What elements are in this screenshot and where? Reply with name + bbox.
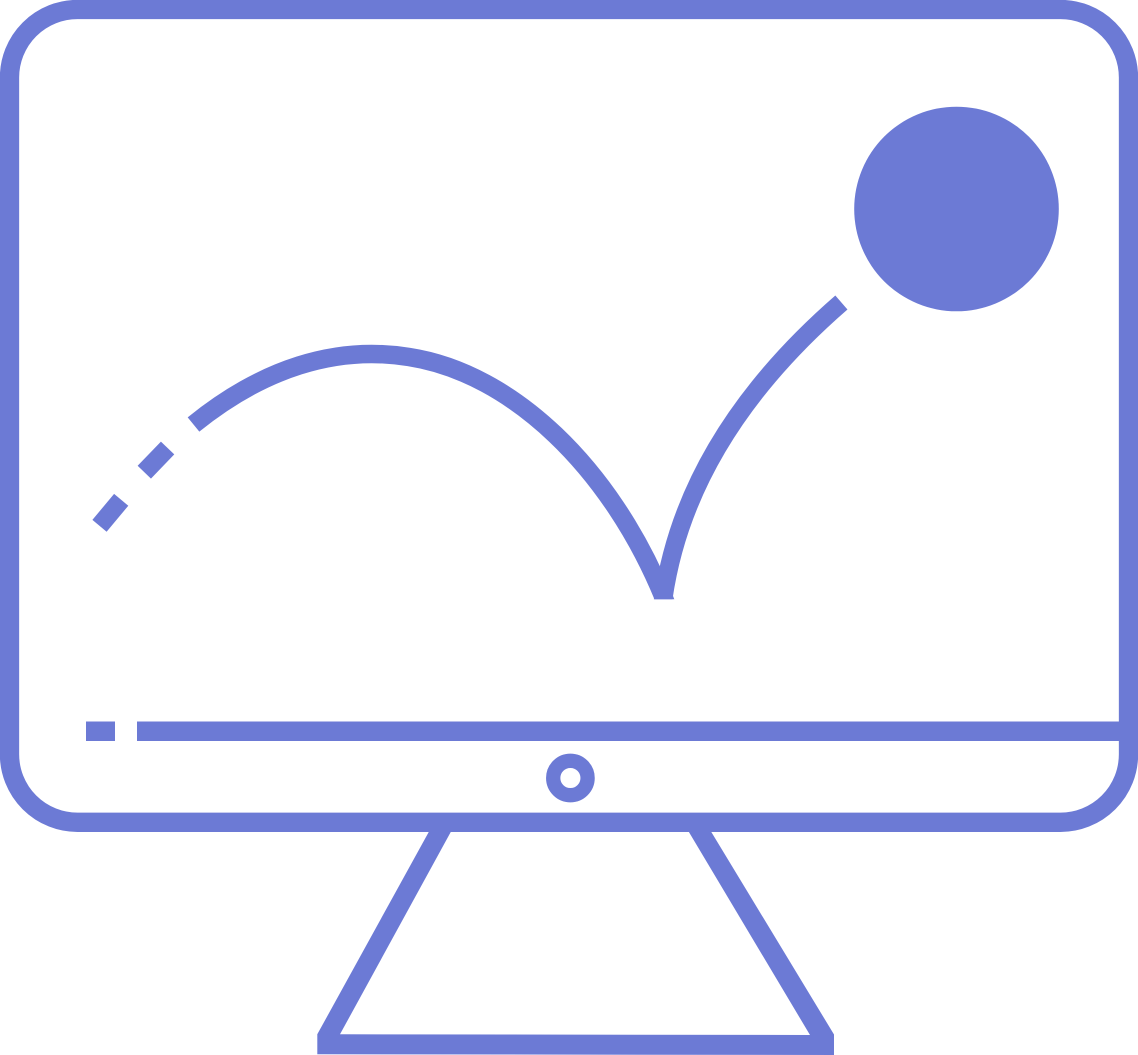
ball xyxy=(854,107,1059,311)
monitor screen frame xyxy=(10,10,1128,822)
bounce arc xyxy=(194,302,841,612)
baseline dash xyxy=(86,722,115,741)
power button xyxy=(553,761,588,795)
dashed trail of the ball xyxy=(100,448,168,526)
baseline xyxy=(137,722,1122,741)
monitor stand xyxy=(317,831,834,1055)
